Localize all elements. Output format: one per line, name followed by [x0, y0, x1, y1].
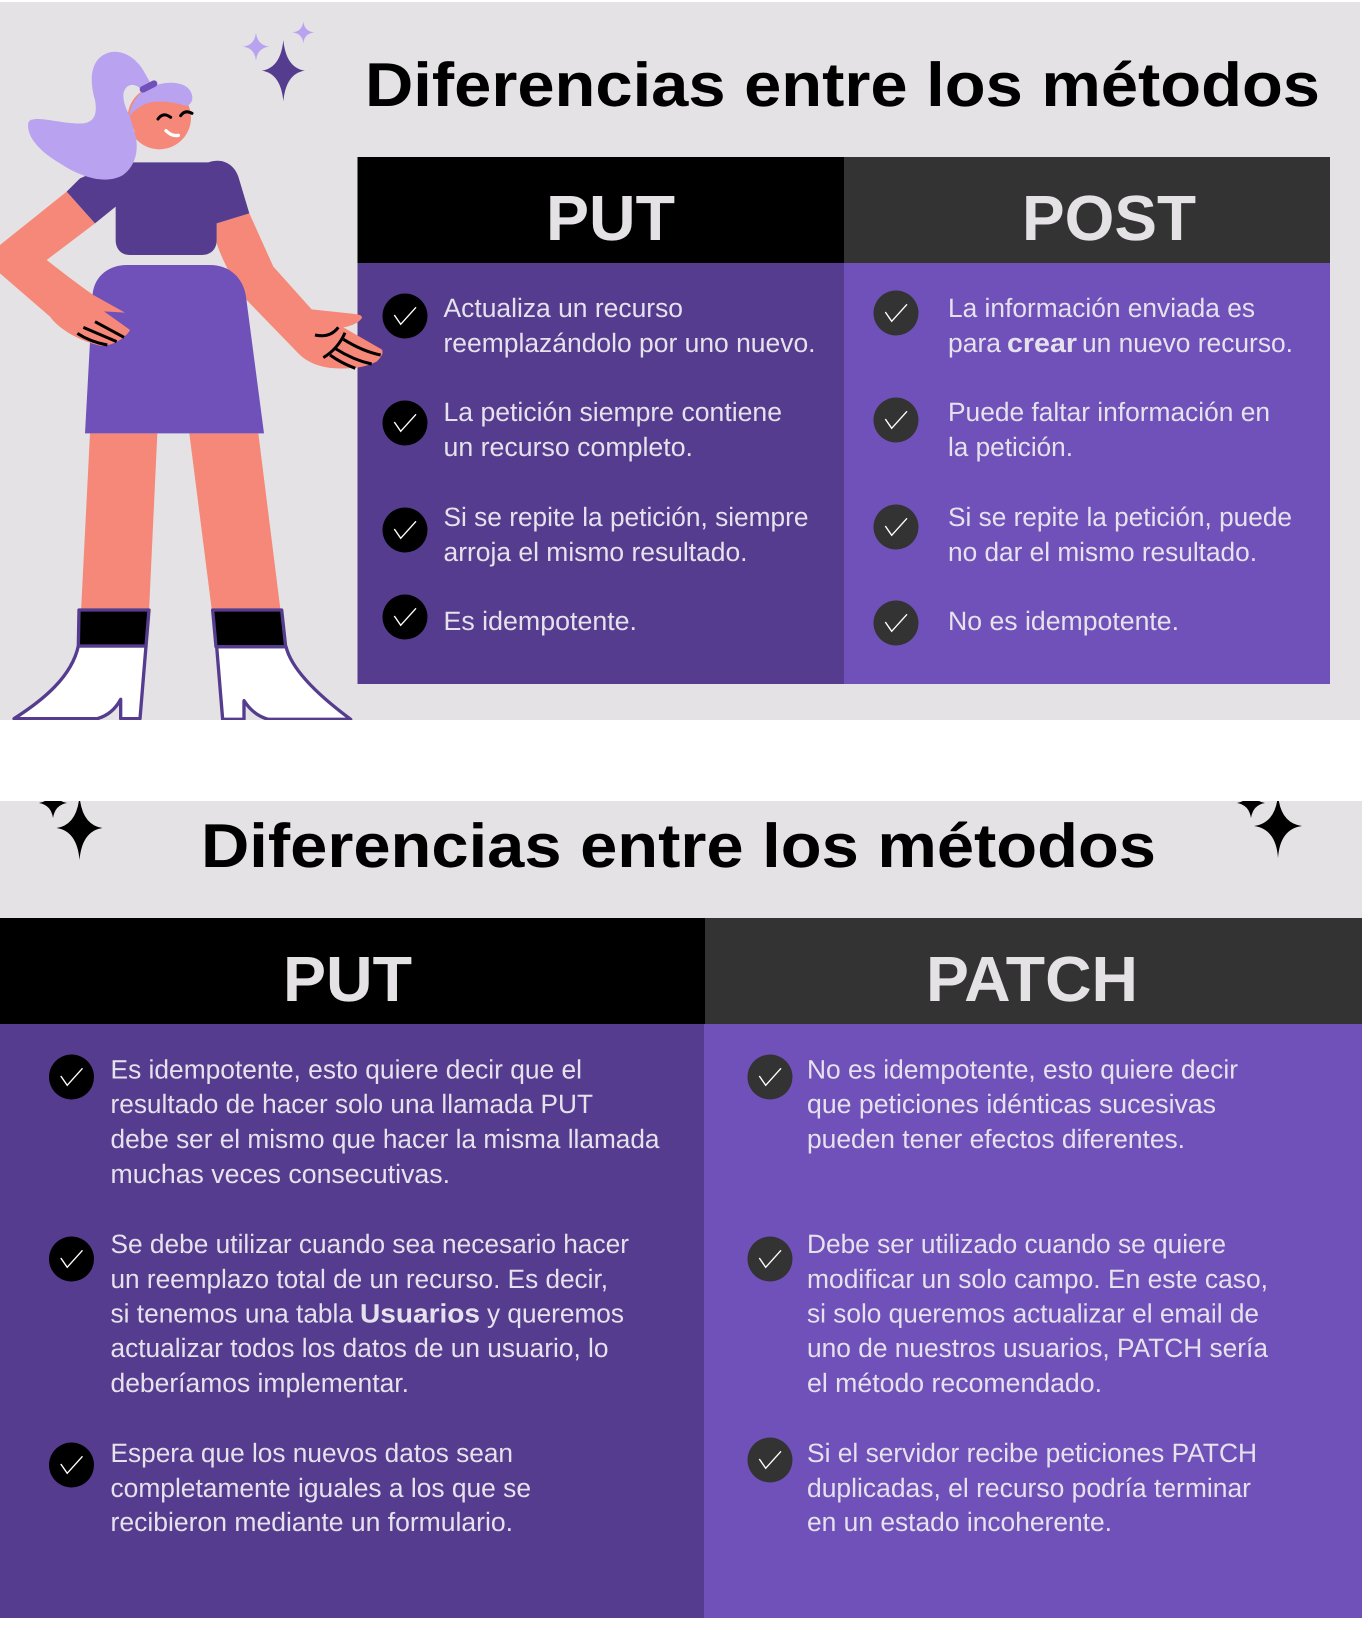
panel: PUT column (bottom table) — [0, 918, 705, 1618]
panel: top section background — [0, 2, 1360, 720]
figure: skirt — [85, 265, 264, 433]
item: total replacement: y queremos — [487, 1298, 624, 1328]
item: complete resource: La petición siempre contiene — [444, 397, 782, 427]
item: replaces resource: reemplazándolo por uno nuevo. — [444, 328, 816, 358]
item: idempotent definition — [49, 1054, 660, 1189]
figure: right boot — [213, 610, 351, 719]
item: idempotent: Es idempotente. — [444, 606, 637, 636]
item: idempotent definition: debe ser el mismo que hacer la misma llamada — [110, 1124, 660, 1154]
figure: hair tie — [143, 84, 154, 89]
item: total replacement: Se debe utilizar cuando sea necesario hacer — [110, 1229, 629, 1259]
item: idempotent — [382, 594, 637, 640]
item: not idempotent — [874, 600, 1179, 646]
item: not idempotent definition — [748, 1054, 1238, 1154]
figure: head — [128, 92, 191, 150]
panel: PATCH column (bottom table) — [704, 918, 1362, 1618]
figure: left boot — [14, 610, 149, 719]
title: top heading: Diferencias entre los métodos — [365, 51, 1320, 120]
item: duplicated requests — [748, 1438, 1257, 1537]
icon: sparkles right — [1237, 801, 1302, 858]
figure: top — [67, 161, 249, 255]
item: complete resource: un recurso completo. — [444, 432, 693, 462]
item: not idempotent definition: pueden tener efectos diferentes. — [807, 1124, 1185, 1154]
panel: POST column (top table) — [844, 157, 1330, 684]
item: total replacement — [49, 1229, 629, 1398]
item: single field — [748, 1229, 1268, 1398]
item: total replacement: actualizar todos los datos de un usuario, lo — [110, 1333, 608, 1363]
panel: PUT column (top table) — [358, 157, 844, 684]
figure: hair — [28, 52, 192, 180]
item: missing information: la petición. — [948, 432, 1073, 462]
title: bottom heading: Diferencias entre los métodos — [201, 812, 1156, 881]
figure: legs — [81, 433, 281, 612]
figure: hand lines — [77, 322, 381, 368]
item: create resource — [874, 290, 1293, 358]
item: missing information: Puede faltar información en — [948, 397, 1270, 427]
item: not idempotent definition: que peticiones idénticas sucesivas — [807, 1089, 1216, 1119]
illustration: standing woman with sparkles — [0, 21, 383, 719]
item: complete resource — [382, 397, 782, 462]
panel: bottom section background — [0, 801, 1362, 918]
item: total replacement: deberíamos implementar. — [110, 1368, 409, 1398]
figure: smile and eyes — [158, 112, 192, 136]
heading: PATCH: PATCH — [926, 943, 1138, 1015]
item: idempotent definition: resultado de hacer solo una llamada PUT — [110, 1089, 593, 1119]
item: single field: si solo queremos actualizar el email de — [807, 1298, 1259, 1328]
item: total replacement: si tenemos una tabla — [110, 1298, 353, 1328]
item: duplicated requests: en un estado incoherente. — [807, 1507, 1112, 1537]
item: create resource: un nuevo recurso. — [1082, 328, 1293, 358]
item: total replacement: Usuarios — [360, 1298, 480, 1328]
item: create resource: para — [948, 328, 1001, 358]
item: create resource: La información enviada es — [948, 293, 1255, 323]
item: single field: uno de nuestros usuarios, PATCH sería — [807, 1333, 1268, 1363]
heading: PUT: PUT — [283, 943, 412, 1015]
item: replaces resource: Actualiza un recurso — [444, 293, 683, 323]
heading: PUT: PUT — [546, 182, 675, 254]
item: single field: el método recomendado. — [807, 1368, 1102, 1398]
item: not idempotent definition: No es idempotente, esto quiere decir — [807, 1054, 1238, 1084]
figure: left arm — [0, 192, 130, 346]
item: new data equal — [49, 1438, 531, 1537]
item: create resource: crear — [1007, 328, 1077, 358]
icon: sparkles left — [39, 801, 102, 860]
item: duplicated requests: Si el servidor recibe peticiones PATCH — [807, 1438, 1257, 1468]
item: same result — [382, 502, 808, 567]
item: new data equal: completamente iguales a los que se — [110, 1473, 531, 1503]
item: missing information — [874, 397, 1270, 462]
item: new data equal: Espera que los nuevos datos sean — [110, 1438, 513, 1468]
item: duplicated requests: duplicadas, el recurso podría terminar — [807, 1473, 1251, 1503]
item: different result: Si se repite la petición, puede — [948, 502, 1292, 532]
item: single field: Debe ser utilizado cuando se quiere — [807, 1229, 1226, 1259]
item: idempotent definition: muchas veces consecutivas. — [110, 1159, 450, 1189]
item: different result — [874, 502, 1292, 567]
item: idempotent definition: Es idempotente, esto quiere decir que el — [110, 1054, 582, 1084]
icon: sparkles — [243, 21, 314, 101]
item: replaces resource — [382, 293, 816, 358]
figure: right arm — [217, 213, 383, 369]
heading: POST: POST — [1022, 182, 1196, 254]
item: not idempotent: No es idempotente. — [948, 606, 1179, 636]
item: new data equal: recibieron mediante un formulario. — [110, 1507, 513, 1537]
item: same result: Si se repite la petición, siempre — [444, 502, 808, 532]
item: same result: arroja el mismo resultado. — [444, 537, 748, 567]
item: single field: modificar un solo campo. En este caso, — [807, 1264, 1268, 1294]
item: total replacement: un reemplazo total de un recurso. Es decir, — [110, 1264, 608, 1294]
item: different result: no dar el mismo resultado. — [948, 537, 1257, 567]
